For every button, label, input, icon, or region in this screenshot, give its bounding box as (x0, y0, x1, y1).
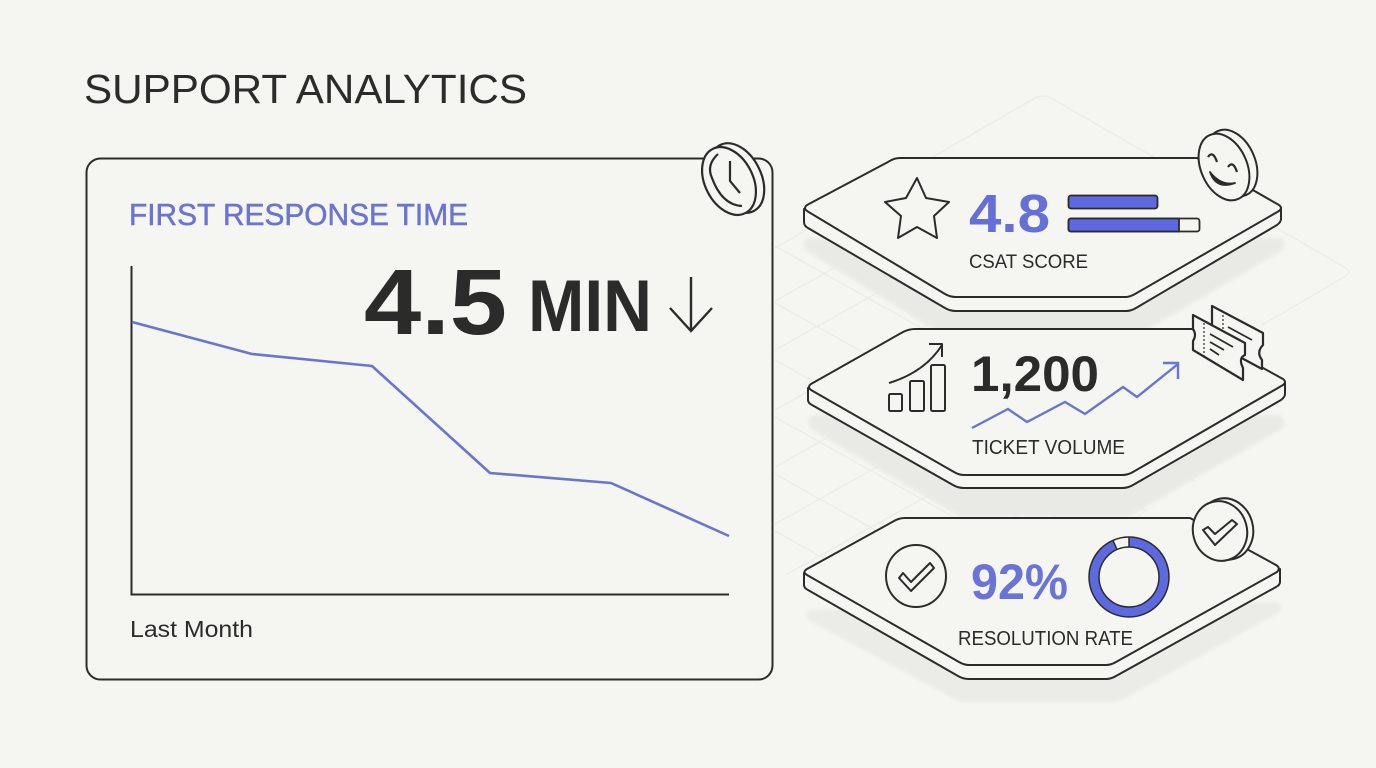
title: SUPPORT ANALYTICS (84, 66, 527, 112)
shadow (808, 415, 1285, 516)
value: 1,200: 1,200 (971, 346, 1099, 402)
panel: CSAT score (803, 122, 1285, 340)
icon: check coin (1186, 492, 1260, 567)
heading: first response time: FIRST RESPONSE TIME (129, 197, 468, 232)
sparkline with arrow (972, 363, 1178, 428)
icon: check circle (886, 545, 946, 607)
icon: down arrow (670, 277, 712, 331)
panel: resolution rate (804, 492, 1282, 702)
icon: rising bar chart (889, 344, 945, 411)
icon: star (885, 178, 949, 238)
platform (804, 518, 1280, 679)
value: 92%: 92% (971, 554, 1068, 610)
shadow (803, 238, 1285, 340)
label: CSAT SCORE (969, 252, 1088, 273)
metric: 4.5 min: MIN (528, 266, 652, 347)
label: RESOLUTION RATE (958, 628, 1133, 650)
shadow (806, 602, 1282, 702)
value: 4.8: 4.8 (969, 184, 1050, 244)
icon: tickets (1193, 306, 1263, 380)
axis label: Last Month (130, 616, 253, 642)
icon: smiley coin (1189, 122, 1267, 208)
panel: ticket volume (808, 306, 1285, 516)
icon: clock coin (691, 134, 775, 224)
platform (808, 329, 1285, 488)
donut chart (1094, 537, 1164, 612)
bars (1068, 196, 1200, 232)
metric: 4.5 min (364, 250, 652, 354)
platform (804, 158, 1281, 311)
metric: 4.5 min: 4.5 (364, 250, 507, 354)
panel: first response time (86, 134, 775, 680)
label: TICKET VOLUME (972, 437, 1125, 459)
line chart (132, 266, 729, 594)
